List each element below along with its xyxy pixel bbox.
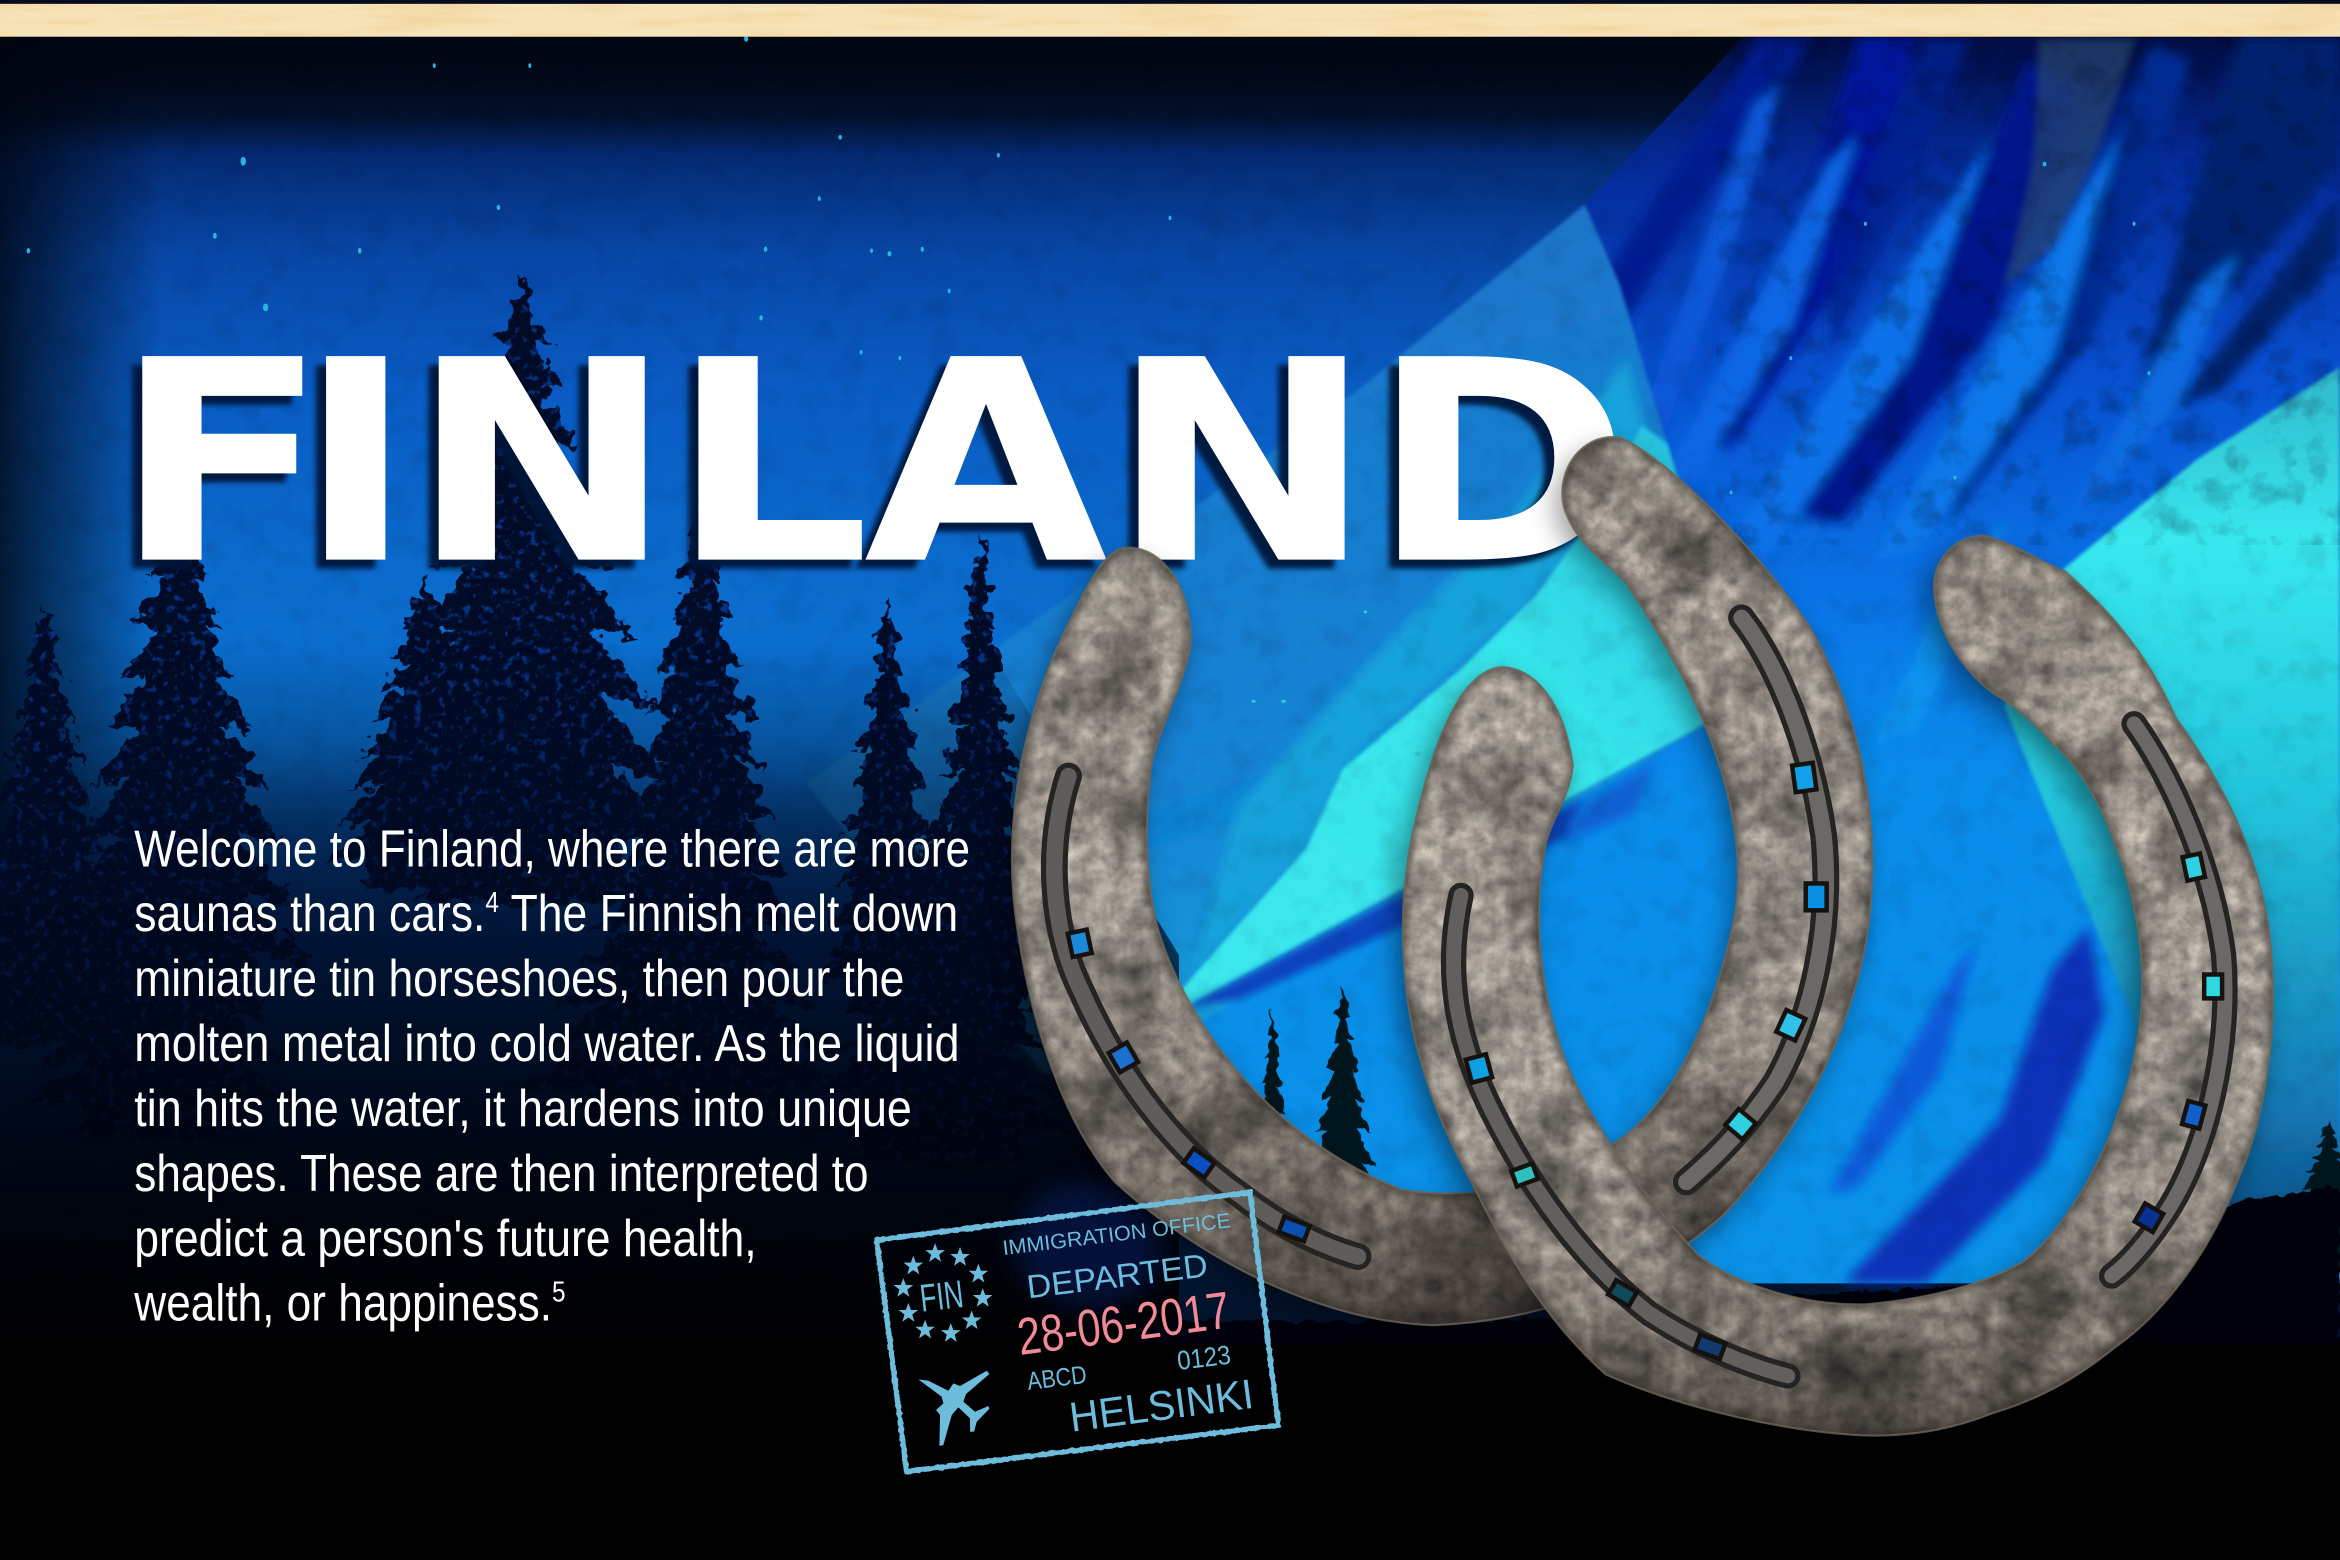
- body text: shapes. These are then interpreted to: [134, 1144, 869, 1202]
- trees: spruce silhouettes on the left: [0, 276, 1192, 1358]
- body text: 4: [485, 887, 499, 919]
- flag: bright cyan right panel: [2004, 367, 2340, 1239]
- icon: airplane: [918, 1371, 989, 1446]
- stamp: immigration office: IMMIGRATION OFFICE: [1001, 1209, 1232, 1260]
- title: FINLAND: [113, 302, 1632, 626]
- stars: [27, 36, 2150, 756]
- groove: front left branch: [1453, 895, 1788, 1376]
- body text: miniature tin horseshoes, then pour the: [134, 949, 904, 1007]
- body text: saunas than cars.: [134, 884, 541, 942]
- rim: back horseshoe: [1012, 437, 1872, 1325]
- flag: mid-tone fold: [1194, 358, 1649, 970]
- body text: 5: [552, 1276, 566, 1308]
- body text: molten metal into cold water. As the liquid: [134, 1014, 960, 1072]
- horseshoe: back: [1006, 437, 1872, 1337]
- top paper strip: [0, 0, 2340, 37]
- horseshoe: front: [1395, 536, 2273, 1448]
- groove: front right branch: [2112, 724, 2225, 1276]
- stamp: departed: DEPARTED: [1025, 1246, 1210, 1305]
- shadow: back horseshoe: [1006, 449, 1866, 1337]
- flag: bright cyan fold: [1179, 425, 1746, 1006]
- body text: The Finnish melt down: [499, 884, 958, 942]
- trees: small spruces against the flag: [1243, 985, 2340, 1298]
- nail holes: back horseshoe: [1068, 763, 1827, 1241]
- surface: front horseshoe: [1403, 536, 2273, 1436]
- stamp: city: HELSINKI: [1067, 1370, 1256, 1441]
- passport stamp: [877, 1192, 1278, 1471]
- flag: dark fold below cyan band: [1188, 800, 1582, 1006]
- flag: waving Finnish flag: [806, 37, 2340, 1283]
- flag: deep blue field with folds: [1188, 37, 2340, 1283]
- stamp: code 0123: 0123: [1175, 1340, 1232, 1376]
- ground: dark forest floor: [0, 642, 2340, 1560]
- stamp: date: 28-06-2017: [1014, 1282, 1233, 1367]
- body text: tin hits the water, it hardens into unique: [134, 1079, 912, 1137]
- body text: predict a person's future health,: [134, 1209, 757, 1267]
- nail holes: front horseshoe: [1466, 854, 2222, 1359]
- shadow: front horseshoe: [1395, 548, 2265, 1448]
- stamp stars: [895, 1244, 991, 1341]
- flag: shaded white panel: [806, 204, 1746, 1074]
- groove: back right branch: [1686, 618, 1826, 1182]
- stamp: code ABCD: ABCD: [1026, 1361, 1088, 1396]
- stamp: FIN: FIN: [918, 1273, 966, 1321]
- surface: back horseshoe: [1012, 437, 1872, 1325]
- stamp frame: [877, 1192, 1278, 1471]
- groove: back left branch: [1054, 776, 1358, 1257]
- rim: front horseshoe: [1403, 536, 2273, 1436]
- body text: wealth, or happiness.: [134, 1274, 621, 1332]
- body text: [133, 819, 970, 1332]
- body text: Welcome to Finland, where there are more: [134, 819, 970, 877]
